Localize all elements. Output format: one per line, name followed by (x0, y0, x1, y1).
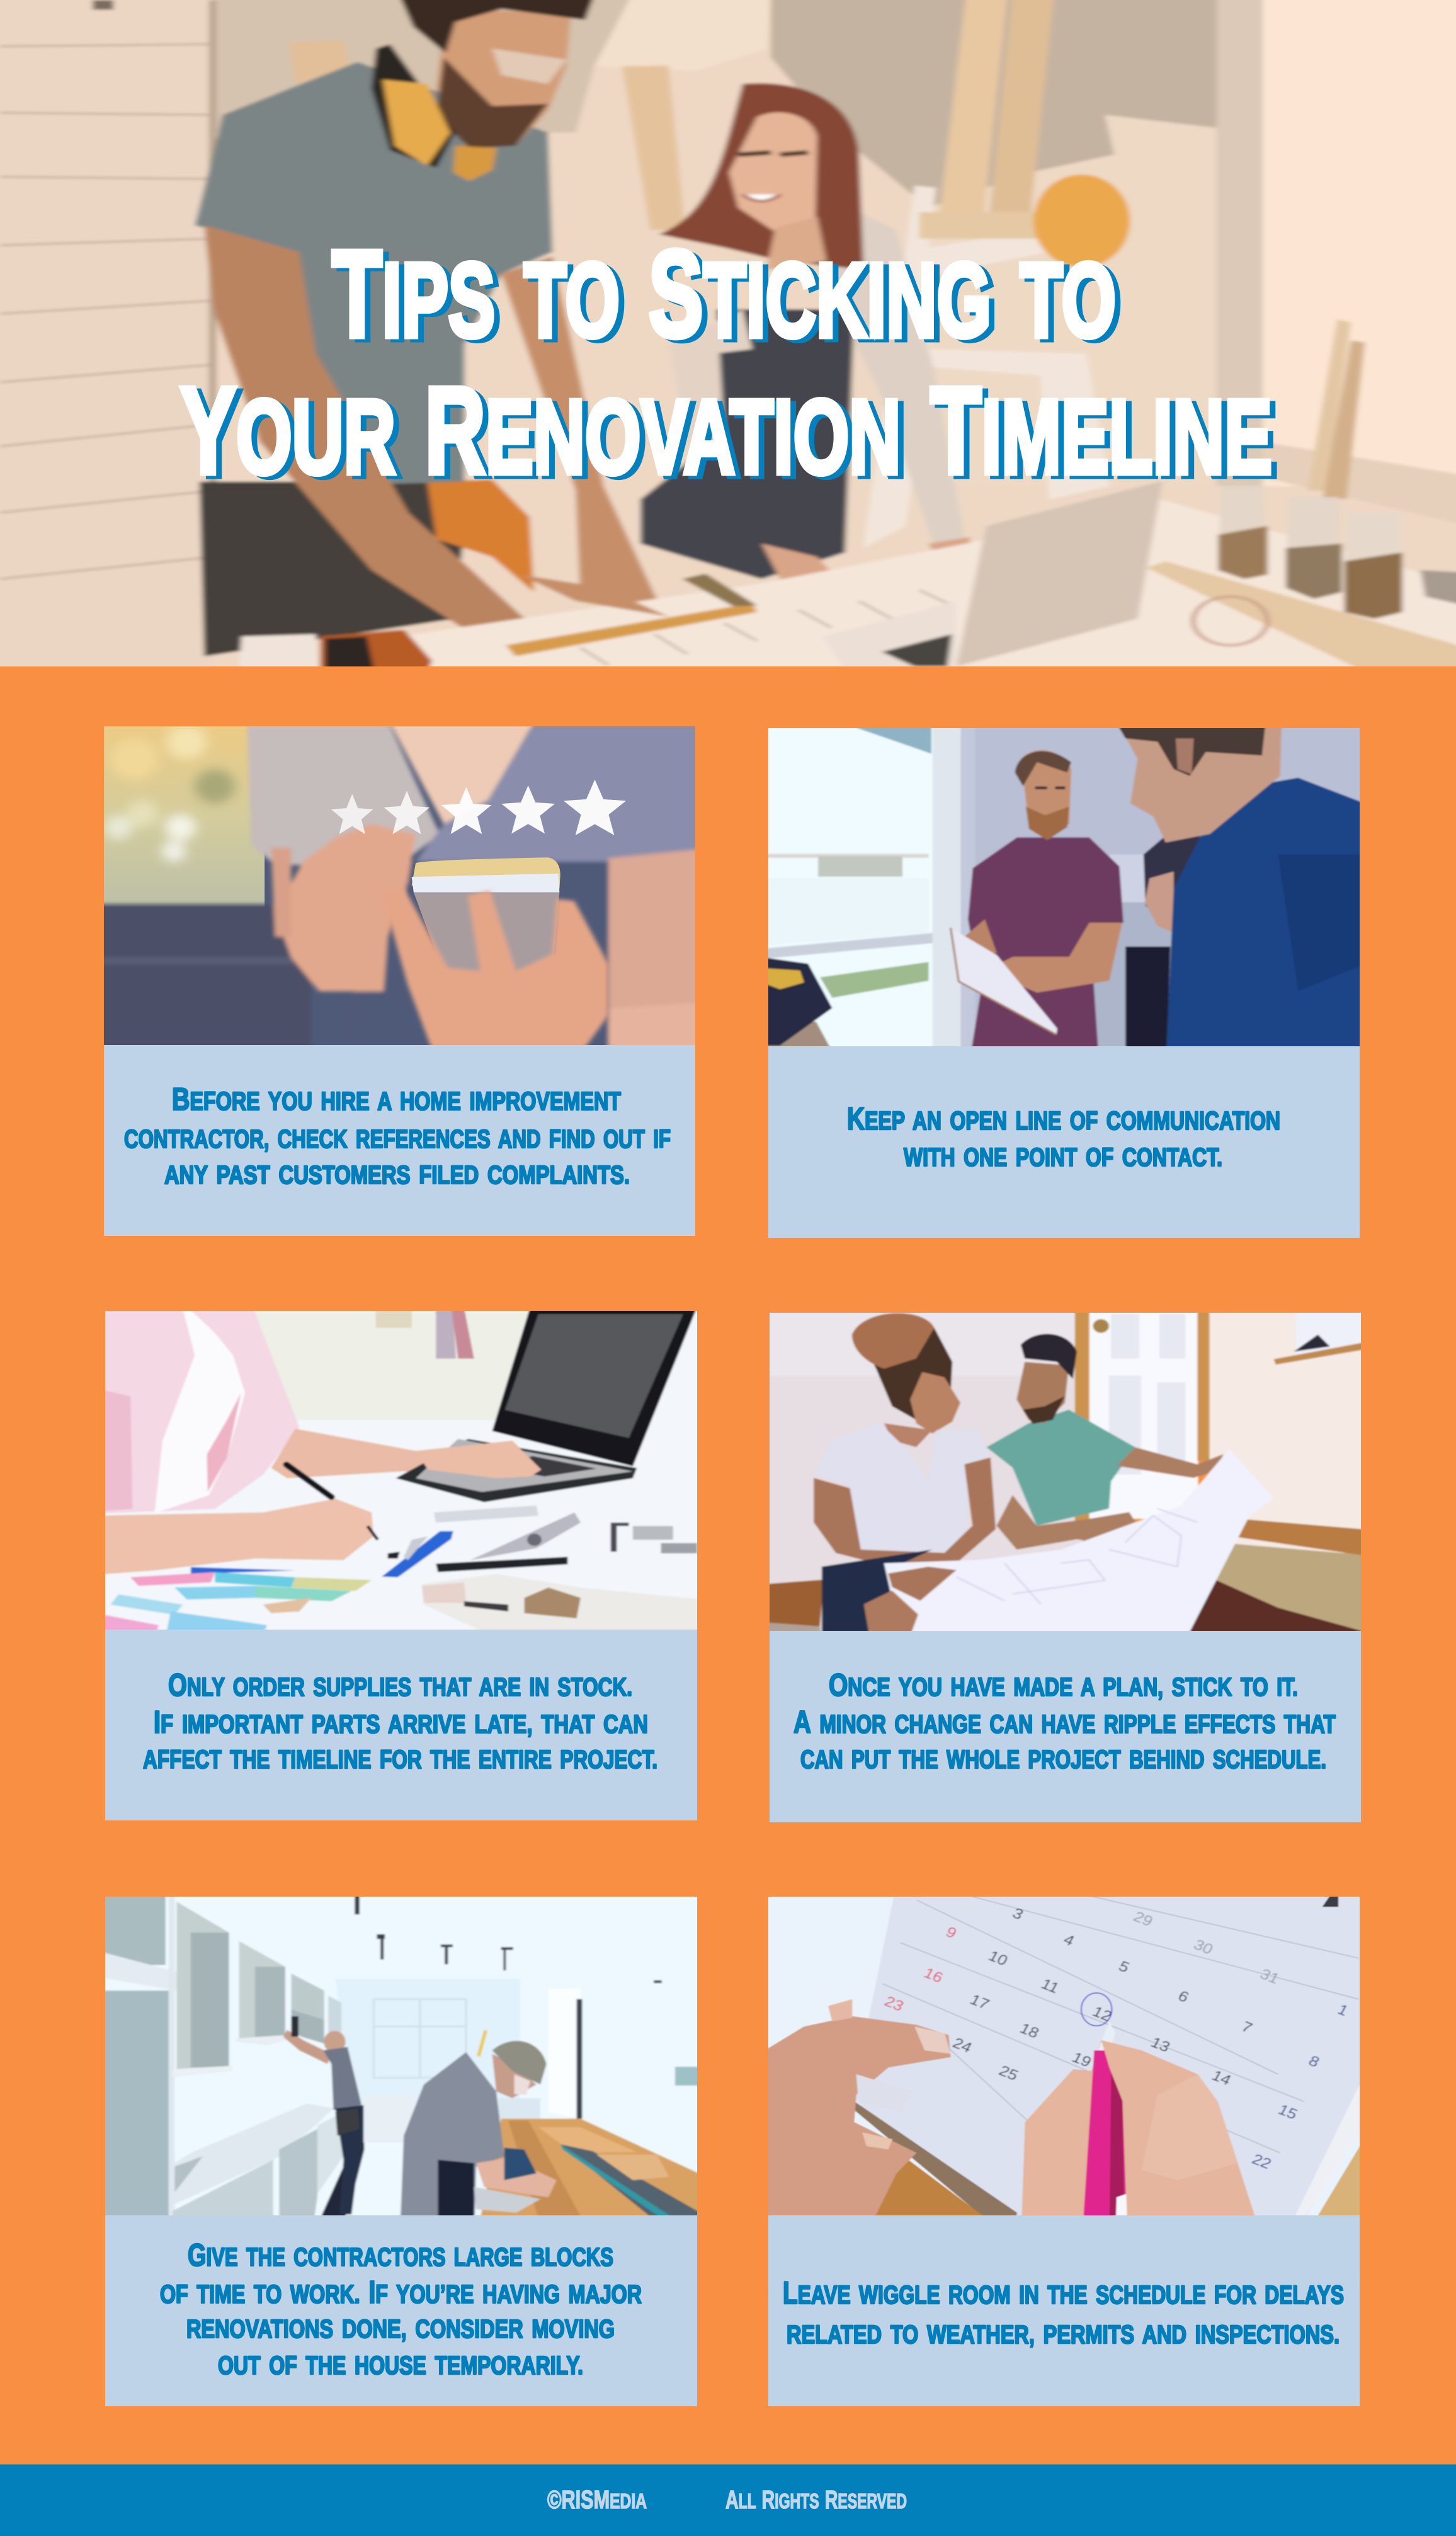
photo: hands marking a calendar: 1 (1334, 2001, 1351, 2019)
jars (1219, 486, 1268, 579)
title (178, 225, 1277, 500)
cupboard back (363, 2095, 416, 2142)
swatch book (86, 1568, 372, 1652)
footer rights: ALL RIGHTS RESERVED (725, 2485, 907, 2514)
panel: wiggle room (768, 1897, 1360, 2406)
wood counter (476, 2119, 721, 2238)
panel: check references (104, 726, 695, 1236)
upper cabinets (86, 1883, 166, 1965)
photo: woman sketching at desk with laptop (105, 1311, 697, 1630)
title: TIPS TO STICKING TO (332, 225, 1116, 363)
photo: hands marking a calendar: 24 (950, 2035, 975, 2056)
photo: hands marking a calendar: 12 (1089, 2003, 1115, 2025)
plan (884, 1449, 1274, 1652)
caption: wiggle room (768, 2215, 1360, 2406)
panel: order supplies in stock (105, 1311, 697, 1820)
caption: check references (104, 1045, 695, 1236)
caption: open communication (768, 1046, 1360, 1238)
photo: contractors fitting a kitchen (105, 1897, 697, 2215)
title: YOUR RENOVATION TIMELINE (180, 362, 1272, 500)
photo: hands marking a calendar: 30 (1191, 1936, 1216, 1958)
photo: hands marking a calendar: 7 (1239, 2018, 1255, 2036)
photo: contractor talking with clients (768, 728, 1360, 1046)
man in blue (1166, 778, 1382, 1066)
chair and hard hat (863, 186, 1110, 548)
man (986, 1410, 1135, 1526)
bottom left tools (237, 634, 321, 699)
photo: hands marking a calendar: 10 (986, 1948, 1011, 1969)
footer copyright: ©RISMEDIA (547, 2485, 647, 2514)
photo: hands marking a calendar: 6 (1175, 1987, 1192, 2006)
photo: hands marking a calendar: 13 (1148, 2034, 1173, 2055)
window (373, 1999, 466, 2077)
photo: hands marking a calendar: 4 (1061, 1931, 1078, 1950)
laptop (492, 1297, 701, 1466)
photo: hands marking a calendar: 18 (1017, 2020, 1042, 2042)
photo: hands marking a calendar: 11 (1038, 1975, 1062, 1997)
panel: stick to the plan (770, 1313, 1361, 1822)
table and laptop (399, 500, 1456, 699)
fireplace (1110, 854, 1154, 904)
worker in the back (283, 2030, 331, 2064)
photo: hands marking a calendar: 25 (996, 2062, 1021, 2084)
photo: couple reviewing floor plan (770, 1313, 1361, 1631)
photo: hands marking a calendar (768, 1897, 1360, 2215)
photo: hands marking a calendar: 22 (1249, 2151, 1274, 2173)
man with clipboard (968, 837, 1123, 1066)
photo: hands marking a calendar: 29 (1130, 1909, 1156, 1930)
photo: hands marking a calendar: 16 (921, 1965, 946, 1986)
drawing tools (382, 1531, 453, 1577)
arm writing (86, 1499, 373, 1575)
woman (669, 345, 794, 568)
photo prints (422, 1574, 721, 1652)
panel: open communication (768, 728, 1360, 1238)
photo: phone with five star rating (104, 726, 695, 1045)
photo: hands marking a calendar: 5 (1116, 1958, 1132, 1976)
caption: order supplies in stock (105, 1630, 697, 1820)
left hand (748, 2016, 951, 2238)
photo: hands marking a calendar: 14 (1209, 2067, 1234, 2089)
right hand and pen (1021, 2040, 1262, 2238)
photo: hands marking a calendar: 15 (1275, 2101, 1300, 2123)
photo: hands marking a calendar: 19 (1069, 2049, 1094, 2070)
lights (355, 1883, 360, 1914)
footer bar (0, 2464, 1456, 2536)
photo: hands marking a calendar: 8 (1305, 2052, 1322, 2070)
lower cabinets (174, 2103, 333, 2204)
caption: large blocks of time: OUT OF THE HOUSE TEMPORARILY. (218, 2351, 583, 2380)
photo: hands marking a calendar: 3 (1010, 1905, 1026, 1923)
hero photo: couple planning renovation (0, 0, 1456, 666)
photo: hands marking a calendar: 23 (882, 1993, 906, 2014)
panel: large blocks of time (105, 1897, 697, 2406)
woman (1144, 831, 1202, 933)
photo: hands marking a calendar: 17 (967, 1991, 992, 2013)
caption: stick to the plan (770, 1631, 1361, 1822)
photo: hands marking a calendar: 9 (943, 1924, 960, 1942)
caption: large blocks of time (105, 2215, 697, 2406)
woman (864, 1318, 952, 1420)
photo: hands marking a calendar: 31 (1257, 1966, 1282, 1987)
man (200, 482, 469, 656)
caption: open communication: WITH ONE POINT OF CONTACT. (904, 1143, 1222, 1172)
worker in front (400, 2052, 504, 2238)
